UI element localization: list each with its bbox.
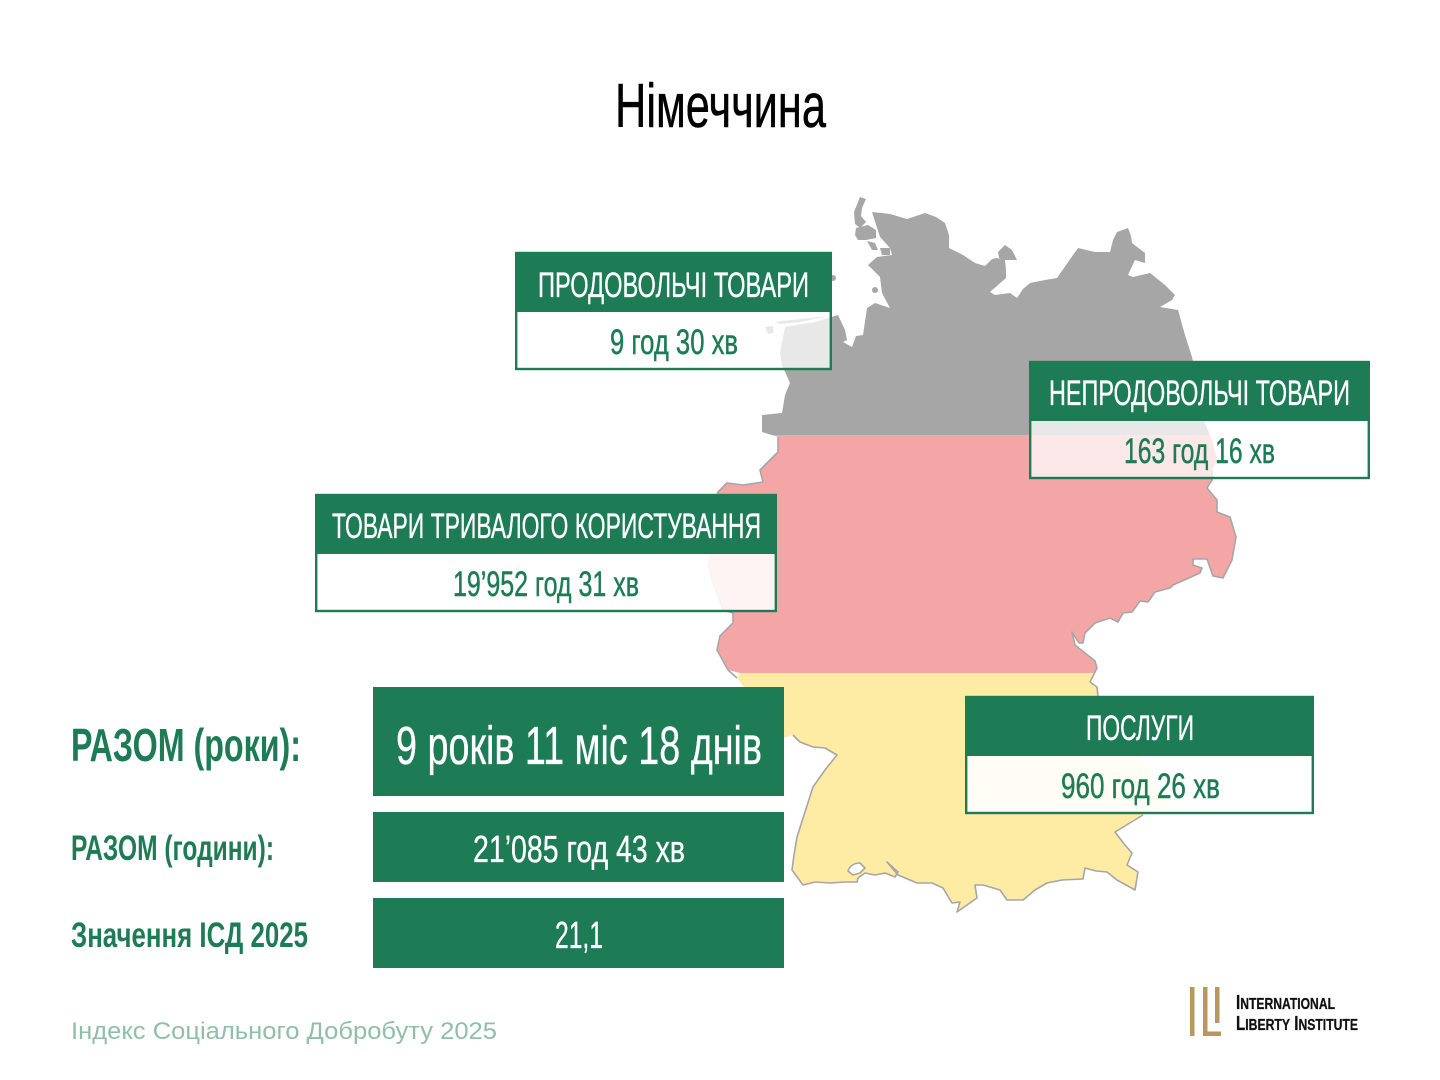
logo text	[1236, 992, 1358, 1035]
value: non-food goods: 163 год 16 хв	[1124, 432, 1275, 471]
heading: durable goods: ТОВАРИ ТРИВАЛОГО КОРИСТУВАННЯ	[332, 507, 761, 546]
panel: non-food goods	[1029, 361, 1370, 478]
panel: services	[965, 696, 1314, 813]
icon: North Sea islands	[765, 197, 1017, 334]
heading: services: ПОСЛУГИ	[1086, 709, 1194, 748]
panel: durable goods	[315, 494, 777, 611]
heading: food goods: ПРОДОВОЛЬЧІ ТОВАРИ	[538, 266, 809, 305]
map: Germany in flag colours	[690, 190, 1250, 918]
value: durable goods: 19’952 год 31 хв	[453, 565, 639, 604]
label: total hours: РАЗОМ (години):	[71, 829, 274, 868]
value: food goods: 9 год 30 хв	[610, 323, 738, 362]
bar: total hours	[373, 812, 784, 882]
logo text: LIBERTY INSTITUTE	[1236, 1013, 1358, 1035]
bar: index value	[373, 898, 784, 968]
bar: total hours: 21’085 год 43 хв	[473, 829, 685, 871]
icon: institute logo	[1190, 987, 1221, 1036]
bar: total years: 9 років 11 міс 18 днів	[396, 716, 762, 776]
bar: total years	[373, 687, 784, 796]
panel: food goods	[515, 252, 832, 369]
label: index value: Значення ІСД 2025	[71, 916, 308, 955]
logo text: INTERNATIONAL	[1236, 992, 1335, 1014]
bar: index value: 21,1	[555, 915, 603, 957]
footer: index name: Індекс Соціального Добробуту 2025	[71, 1018, 497, 1045]
title: Німеччина	[615, 72, 826, 141]
label: total years: РАЗОМ (роки):	[71, 719, 301, 771]
value: services: 960 год 26 хв	[1061, 767, 1220, 806]
